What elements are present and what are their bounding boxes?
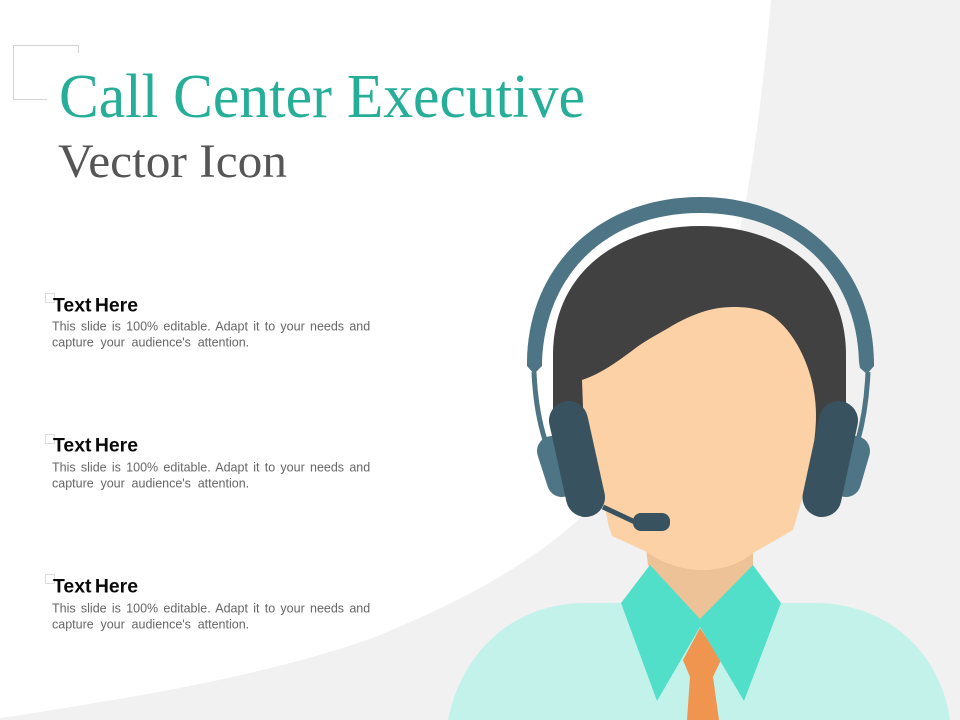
right ear cup inner [822,420,838,498]
heading 2: Text Here [53,436,138,456]
body 3: capture your audience's attention. [52,618,249,632]
body 2: capture your audience's attention. [52,476,249,490]
right ear cup outer [846,451,855,482]
left ear cup outer [552,451,562,482]
left collar [621,565,700,701]
body 1: capture your audience's attention. [52,336,249,350]
body 2: This slide is 100% editable. Adapt it to your needs and [52,460,370,474]
title: Call Center Executive [59,63,585,131]
text block 2 [46,434,370,490]
shirt [448,603,950,720]
microphone [633,513,670,531]
heading 1: Text Here [53,296,138,316]
headband left arm [534,372,545,440]
title accent frame [14,46,78,100]
subtitle: Vector Icon [58,135,287,188]
text block 3 [46,574,370,632]
tie [683,628,721,720]
text block 1 [46,294,370,350]
right collar [700,565,781,701]
body 3: This slide is 100% editable. Adapt it to your needs and [52,602,370,616]
hair [553,226,846,440]
icon: call center executive [448,197,950,720]
face [582,307,816,570]
headband [527,197,874,374]
heading 3: Text Here [53,576,138,598]
marker 2 [46,434,54,444]
marker 1 [46,294,54,302]
microphone boom [603,507,637,523]
left ear cup inner [568,420,586,498]
neck [645,540,753,628]
body 1: This slide is 100% editable. Adapt it to your needs and [52,320,370,334]
marker 3 [46,574,54,584]
headband right arm [858,372,868,440]
